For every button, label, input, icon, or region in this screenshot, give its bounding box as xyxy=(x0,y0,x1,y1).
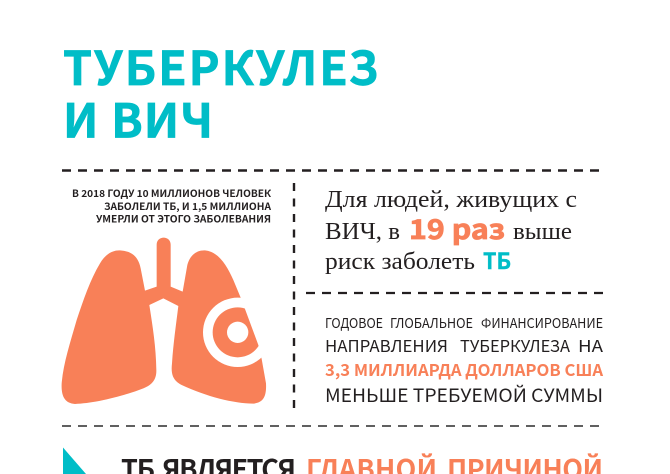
title: И ВИЧ xyxy=(63,84,213,152)
text: global funding statement: НАПРАВЛЕНИЯ xyxy=(325,333,448,357)
text: HIV risk statement: ТБ xyxy=(483,244,511,276)
text: HIV risk statement xyxy=(325,186,577,276)
text: HIV risk statement: 19 раз xyxy=(409,208,505,247)
icon: lungs xyxy=(62,238,272,404)
text: global funding statement: ФИНАНСИРОВАНИЕ xyxy=(481,312,603,332)
text: global funding statement: 3,3 МИЛЛИАРДА ДОЛЛАРОВ США xyxy=(325,357,603,381)
text: global funding statement: ТУБЕРКУЛЕЗА xyxy=(460,333,570,357)
text: HIV risk statement: ВИЧ, в xyxy=(325,218,400,245)
text: global funding statement: ГЛОБАЛЬНОЕ xyxy=(390,312,473,332)
title xyxy=(63,32,378,152)
text: HIV risk statement: Для людей, живущих с xyxy=(325,186,577,213)
heading: TB leading cause xyxy=(121,448,603,474)
text: global funding statement: НА xyxy=(578,333,603,357)
text: 2018 statistics: ЗАБОЛЕЛИ ТБ, И 1,5 МИЛЛИОНА xyxy=(104,199,272,213)
text: 2018 statistics: В 2018 ГОДУ 10 МИЛЛИОНОВ ЧЕЛОВЕК xyxy=(72,186,271,200)
text: 2018 statistics: УМЕРЛИ ОТ ЭТОГО ЗАБОЛЕВАНИЯ xyxy=(96,212,271,226)
title: ТУБЕРКУЛЕЗ xyxy=(63,32,378,99)
text: HIV risk statement: выше xyxy=(513,218,572,245)
text: global funding statement: МЕНЬШЕ ТРЕБУЕМОЙ СУММЫ xyxy=(325,382,603,408)
text: global funding statement xyxy=(325,312,603,408)
text: 2018 statistics xyxy=(72,186,272,226)
text: global funding statement: ГОДОВОЕ xyxy=(325,312,383,332)
icon: teal triangle marker xyxy=(63,448,86,474)
text: HIV risk statement: риск заболеть xyxy=(325,248,475,275)
